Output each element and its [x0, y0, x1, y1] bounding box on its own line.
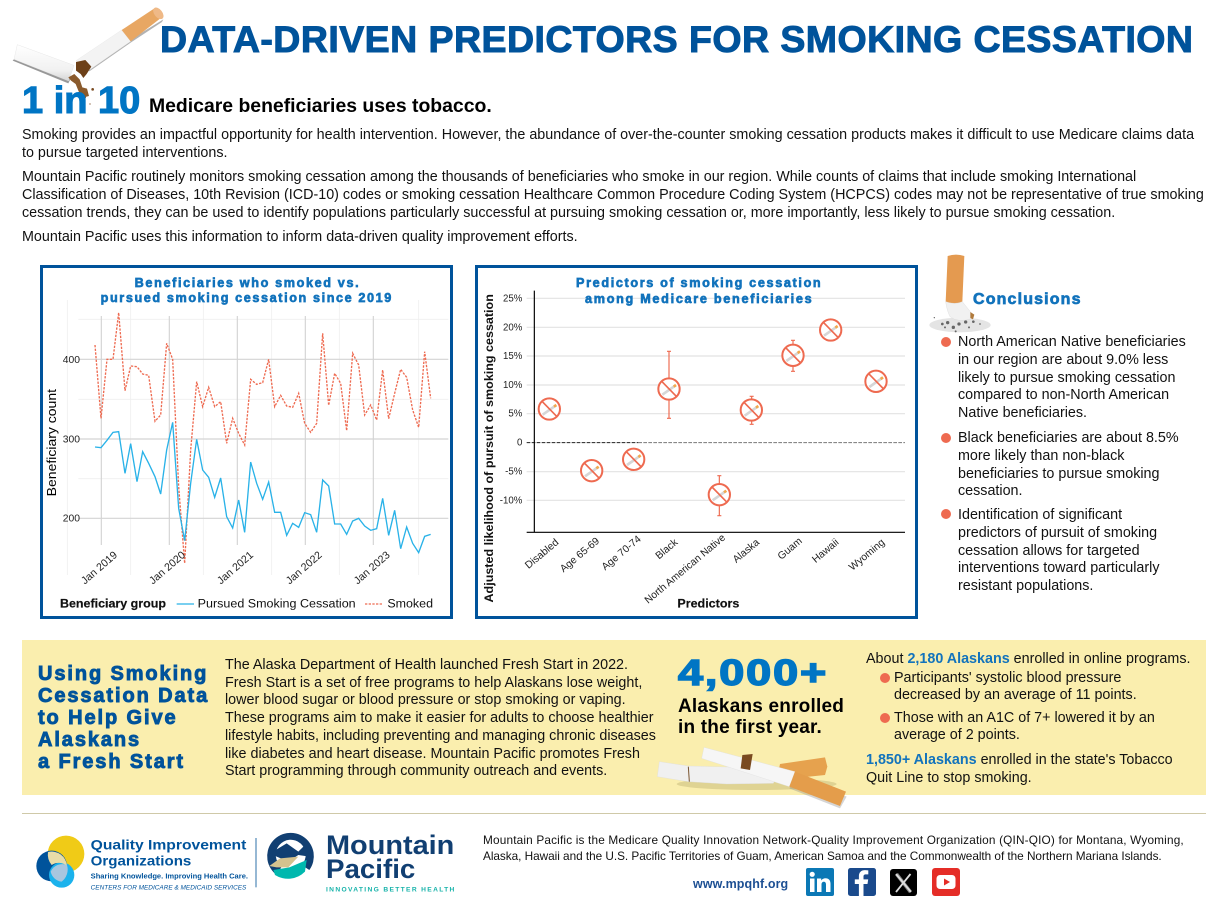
logo: QIO wordmark: Quality Improvement [91, 837, 247, 852]
x axis title: Predictors [677, 597, 740, 611]
conclusions list [941, 334, 1186, 594]
bullet: A1C [880, 710, 1155, 743]
x axis labels: Guam [776, 536, 805, 562]
icon: crossed cigarettes [657, 747, 846, 808]
heading: Fresh Start: a Fresh Start [38, 751, 185, 773]
text block: monitoring: Mountain Pacific routinely monitors smoking cessation among the thousands of beneficiaries who smoke in our region. While counts of claims that include smoking International [22, 169, 1136, 185]
conclusion 3: interventions toward particularly [958, 560, 1159, 576]
y axis labels [63, 355, 80, 525]
divider [22, 813, 1206, 814]
panel: predictors chart [475, 265, 918, 619]
error bars [667, 340, 795, 516]
y axis labels: 300 [63, 434, 80, 445]
line: smoked [95, 313, 431, 563]
x axis labels: Jan 2020 [147, 549, 188, 587]
heading: Fresh Start: to Help Give [38, 707, 178, 729]
chart title: Predictors of smoking cessation [576, 276, 821, 290]
y axis labels: 400 [63, 355, 80, 366]
bullet: blood pressure: Participants' systolic blood pressure [894, 670, 1121, 686]
x axis labels: Wyoming [847, 537, 887, 573]
conclusion 1: Native beneficiaries. [958, 405, 1087, 421]
logo: Mountain Pacific wordmark: Mountain [326, 830, 454, 860]
text block: Fresh Start description: like diabetes and heart disease. Mountain Pacific promotes Fresh [225, 746, 640, 762]
x axis labels: Black [654, 537, 681, 562]
conclusion 1: in our region are about 9.0% less [958, 352, 1168, 368]
online enrollment: About 2,180 Alaskans enrolled in online programs. [866, 651, 1190, 667]
logo: Mountain Pacific mark [267, 833, 314, 879]
conclusion 2: more likely than non-black [958, 448, 1124, 464]
logo: QIO wordmark: Organizations [91, 853, 192, 868]
chart title: pursued smoking cessation since 2019 [101, 291, 391, 305]
text block: Fresh Start description: Start programming through community outreach and events. [225, 763, 607, 779]
x axis labels: Alaska [731, 537, 762, 566]
heading: Fresh Start: Cessation Data [38, 685, 209, 707]
conclusion 2: Black beneficiaries are about 8.5% [958, 430, 1179, 446]
logo: QIO wordmark [91, 837, 248, 891]
x axis labels: Age 65-69 [558, 536, 602, 575]
logo: Mountain Pacific wordmark [326, 830, 455, 894]
icon: X [890, 869, 917, 896]
heading: Fresh Start [38, 663, 209, 773]
logo: QIO wordmark: Sharing Knowledge. Improving Health Care. [91, 871, 248, 880]
bullet: A1C: average of 2 points. [894, 727, 1020, 743]
text block: Fresh Start description: lifestyle habits, including preventing and managing chronic diseases [225, 728, 656, 744]
conclusion 3: Identification of significant [958, 507, 1122, 523]
icon: broken cigarette [12, 8, 164, 105]
quit line enrollment: Quit Line to stop smoking. [866, 770, 1032, 786]
y axis labels [500, 293, 523, 506]
text block: Fresh Start description: The Alaska Department of Health launched Fresh Start in 2022. [225, 657, 628, 673]
statistic label: in the first year. [678, 717, 822, 738]
legend: Smoked [387, 597, 433, 611]
zero line [527, 441, 905, 444]
statistic label [678, 696, 844, 738]
conclusion 3: predictors of pursuit of smoking [958, 525, 1157, 541]
icon: YouTube [932, 868, 960, 896]
icon: Facebook [848, 868, 876, 896]
panel: Fresh Start band [22, 640, 1206, 795]
text block: monitoring: cessation trends, they can be used to identify populations particularly successful at pursuing smoking cessation or, more importantly, less likely to pursue smoking cessation. [22, 205, 1115, 221]
bullet: blood pressure: decreased by an average of 11 points. [894, 687, 1137, 703]
x axis labels: Jan 2022 [284, 549, 325, 587]
logos [36, 830, 455, 894]
y axis labels: 10% [503, 380, 523, 391]
legend: Beneficiary group [60, 597, 166, 611]
conclusion 1 [941, 334, 1186, 421]
bullet: A1C: Those with an A1C of 7+ lowered it by an [894, 710, 1155, 726]
text block: monitoring: Classification of Diseases, 10th Revision (ICD-10) codes or smoking cessation Healthcare Common Procedure Coding System (HCPCS) codes may not be representative of true smoking [22, 187, 1204, 203]
text block: Fresh Start description [225, 657, 656, 779]
statistic label: Alaskans enrolled [678, 696, 844, 717]
text block: Fresh Start description: lower blood sugar or blood pressure or stop smoking or vaping. [225, 692, 626, 708]
statistic: 1 in 10: 1 in 10 [22, 80, 140, 122]
legend: Pursued Smoking Cessation [198, 597, 356, 611]
heading: Fresh Start: Using Smoking [38, 663, 208, 685]
quit line enrollment: 1,850+ Alaskans enrolled in the state's Tobacco [866, 752, 1173, 768]
conclusion 2 [941, 430, 1179, 499]
conclusion 1: likely to pursue smoking cessation [958, 370, 1175, 386]
x axis labels: Disabled [523, 537, 561, 571]
axes [527, 291, 905, 532]
text block: Fresh Start description: Fresh Start is a set of free programs to help Alaskans lose weight, [225, 675, 642, 691]
markers: no-smoking icons [538, 319, 887, 506]
conclusion 1: compared to non-North American [958, 387, 1169, 403]
title: DATA-DRIVEN PREDICTORS FOR SMOKING CESSATION [160, 18, 1193, 60]
y axis labels: 0 [517, 438, 522, 449]
logo: Mountain Pacific wordmark: INNOVATING BETTER HEALTH [326, 887, 455, 894]
line: pursued smoking cessation [95, 422, 431, 553]
y axis title: Beneficiary count [44, 389, 59, 496]
conclusion 2: cessation. [958, 483, 1023, 499]
text block: introduction: to pursue targeted interventions. [22, 145, 228, 161]
text block: organization statement: Mountain Pacific is the Medicare Quality Innovation Network-Quality Improvement Organization (QIN-QIO) for Montana, Wyoming, [483, 833, 1184, 847]
text block: organization statement: Alaska, Hawaii and the U.S. Pacific Territories of Guam, American Samoa and the Commonwealth of the Northern Mariana Islands. [483, 848, 1162, 862]
x axis labels [79, 549, 393, 587]
chart title [101, 276, 391, 305]
panel: line chart [40, 265, 453, 619]
y axis labels: 200 [63, 514, 80, 525]
x axis labels: Jan 2021 [215, 549, 256, 587]
text block: organization statement [483, 833, 1184, 862]
y axis labels: 25% [503, 293, 523, 304]
conclusion 2: beneficiaries to pursue smoking [958, 466, 1160, 482]
heading: conclusions: Conclusions [973, 291, 1082, 308]
chart title [576, 276, 821, 306]
logo separator [254, 838, 258, 887]
logo: QIO circles [36, 836, 84, 888]
statistic label: Medicare beneficiaries uses tobacco. [149, 95, 492, 117]
conclusion 3: cessation allows for targeted [958, 542, 1140, 558]
text block: data use: Mountain Pacific uses this information to inform data-driven quality improvement efforts. [22, 229, 578, 245]
icon: LinkedIn [806, 868, 834, 896]
x axis labels [523, 532, 887, 606]
x axis labels: Hawaii [810, 537, 841, 566]
text block: monitoring [22, 169, 1204, 221]
text block: introduction [22, 127, 1194, 161]
conclusion 3: resistant populations. [958, 578, 1093, 594]
bullet: blood pressure [880, 670, 1137, 703]
text block: online programs [866, 651, 1190, 786]
y axis labels: -10% [500, 495, 523, 506]
chart title: among Medicare beneficiaries [585, 292, 812, 306]
y axis title: Adjusted likelihood of pursuit of smoking cessation [482, 294, 496, 602]
website: www.mpqhf.org [693, 877, 788, 891]
conclusion 3 [941, 507, 1160, 594]
y axis labels: 5% [508, 409, 523, 420]
logo: QIO wordmark: CENTERS FOR MEDICARE & MEDICAID SERVICES [91, 884, 247, 891]
text block: introduction: Smoking provides an impactful opportunity for health intervention. However, the abundance of over-the-counter smoking cessation products makes it difficult to use Medicare claims data [22, 127, 1194, 143]
icon: stubbed cigarette [930, 254, 990, 332]
x axis labels: Age 70-74 [600, 534, 644, 573]
quit line enrollment [866, 752, 1173, 786]
legend [60, 597, 433, 611]
chart title: Beneficiaries who smoked vs. [135, 276, 359, 290]
conclusion 1: North American Native beneficiaries [958, 334, 1186, 350]
x axis labels: Jan 2023 [352, 549, 393, 587]
y axis labels: -5% [505, 467, 523, 478]
x axis labels: North American Native [643, 532, 728, 606]
logo: Mountain Pacific wordmark: Pacific [326, 854, 416, 884]
x axis labels: Jan 2019 [79, 549, 120, 587]
heading: Fresh Start: Alaskans [38, 729, 141, 751]
statistic: 4,000+: 4,000+ [678, 652, 828, 693]
y axis labels: 15% [503, 351, 523, 362]
text block: Fresh Start description: These programs aim to make it easier for adults to choose healthier [225, 710, 653, 726]
y axis labels: 20% [503, 322, 523, 333]
